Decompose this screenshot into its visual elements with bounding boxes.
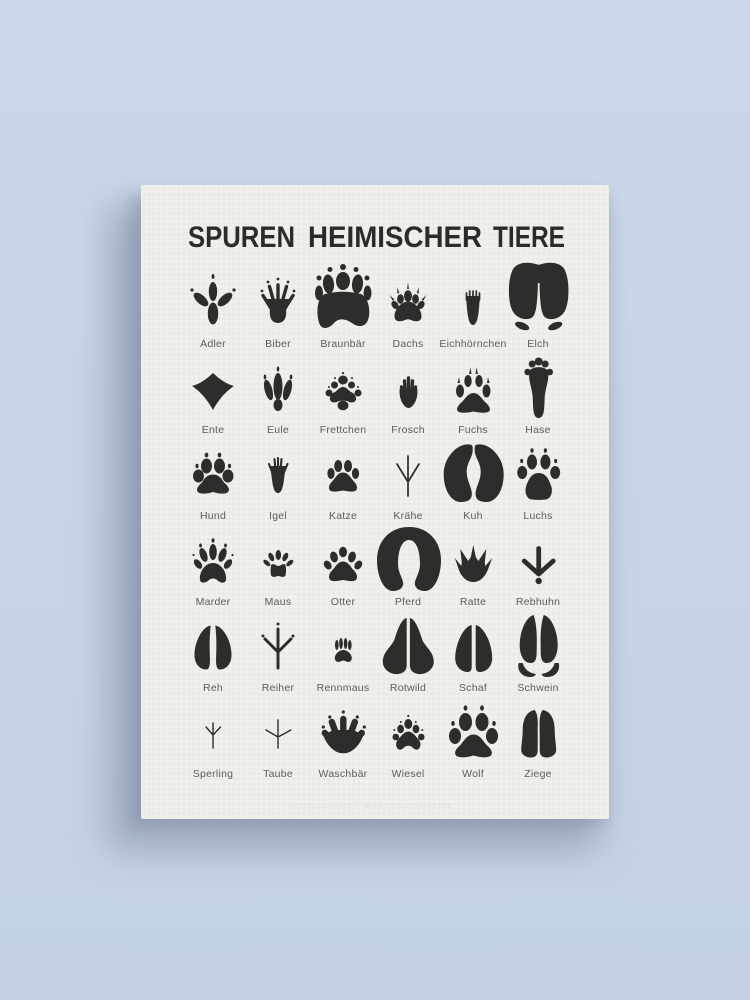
icon: Elch [509, 263, 568, 332]
icon: Pferd [377, 527, 441, 591]
icon: Wiesel [392, 715, 425, 750]
icon: Biber [261, 278, 295, 323]
label: Waschbär: Waschbär [319, 768, 368, 780]
icon: Reiher [262, 622, 294, 668]
icon: Rennmaus [335, 638, 352, 662]
label: Eichhörnchen: Eichhörnchen [439, 338, 507, 350]
label: Braunbär: Braunbär [320, 338, 366, 350]
label: Eule: Eule [267, 424, 289, 436]
icon: Schaf [455, 625, 492, 672]
icon: Reh [194, 626, 232, 670]
icon: Marder [192, 538, 234, 583]
icon: Hund [193, 453, 234, 494]
canvas shadow [108, 195, 607, 850]
title: HEIMISCHER [308, 221, 482, 254]
icon: Krähe [397, 456, 419, 496]
footer credit: ASTRID LUCKHARDT · WWW.DISTLUCKHARDT.DE [289, 804, 453, 810]
icon: Kuh [444, 444, 504, 502]
icon: Luchs [517, 448, 560, 500]
label: Pferd: Pferd [395, 596, 421, 608]
canvas panel [141, 185, 609, 819]
label: Katze: Katze [329, 510, 357, 522]
label: Schwein: Schwein [517, 682, 559, 694]
label: Schaf: Schaf [459, 682, 487, 694]
icon: Schwein [518, 615, 559, 677]
label: Otter: Otter [331, 596, 356, 608]
label: Wolf: Wolf [462, 768, 484, 780]
icon: Taube [266, 720, 291, 748]
label: Dachs: Dachs [392, 338, 424, 350]
icon: Waschbär [322, 710, 366, 753]
label: Reiher: Reiher [262, 682, 294, 694]
icon: Ziege [521, 710, 556, 758]
label: Igel: Igel [269, 510, 287, 522]
label: Ziege: Ziege [524, 768, 552, 780]
icon: Ratte [455, 545, 492, 582]
icon: Eule [262, 366, 294, 411]
icon: Adler [190, 274, 236, 324]
label: Maus: Maus [265, 596, 291, 608]
label: Biber: Biber [265, 338, 291, 350]
icon: Fuchs [456, 368, 490, 413]
label: Taube: Taube [263, 768, 293, 780]
icon: Wolf [449, 705, 498, 757]
icon: Ente [192, 373, 234, 410]
title: SPUREN [188, 221, 295, 254]
label: Hase: Hase [525, 424, 551, 436]
label: Adler: Adler [200, 338, 226, 350]
label: Frosch: Frosch [391, 424, 425, 436]
icon: Otter [322, 547, 364, 581]
icon: Igel [269, 458, 288, 493]
label: Wiesel: Wiesel [391, 768, 425, 780]
label: Rotwild: Rotwild [390, 682, 426, 694]
label: Ratte: Ratte [460, 596, 486, 608]
label: Krähe: Krähe [393, 510, 423, 522]
title: TIERE [493, 221, 565, 254]
icon: Frosch [400, 378, 417, 408]
icon: Rotwild [383, 618, 434, 674]
icon: Frettchen [326, 372, 362, 410]
label: Rennmaus: Rennmaus [317, 682, 369, 694]
label: Sperling: Sperling [193, 768, 233, 780]
label: Fuchs: Fuchs [458, 424, 488, 436]
icon: Sperling [206, 723, 220, 748]
icon: Katze [327, 460, 359, 492]
title [188, 221, 565, 254]
label: Rebhuhn: Rebhuhn [516, 596, 560, 608]
icon: Eichhörnchen [466, 291, 480, 325]
icon: Rebhuhn [524, 548, 553, 584]
label: Ente: Ente [202, 424, 224, 436]
label: Luchs: Luchs [523, 510, 553, 522]
label: Marder: Marder [196, 596, 231, 608]
icon: Dachs [390, 282, 426, 321]
label: Reh: Reh [203, 682, 223, 694]
label: Elch: Elch [527, 338, 549, 350]
icon: Braunbär [315, 264, 372, 328]
label: Kuh: Kuh [463, 510, 483, 522]
label: Frettchen: Frettchen [320, 424, 366, 436]
icon: Hase [524, 358, 553, 418]
icon: Maus [262, 550, 294, 577]
label: Hund: Hund [200, 510, 226, 522]
